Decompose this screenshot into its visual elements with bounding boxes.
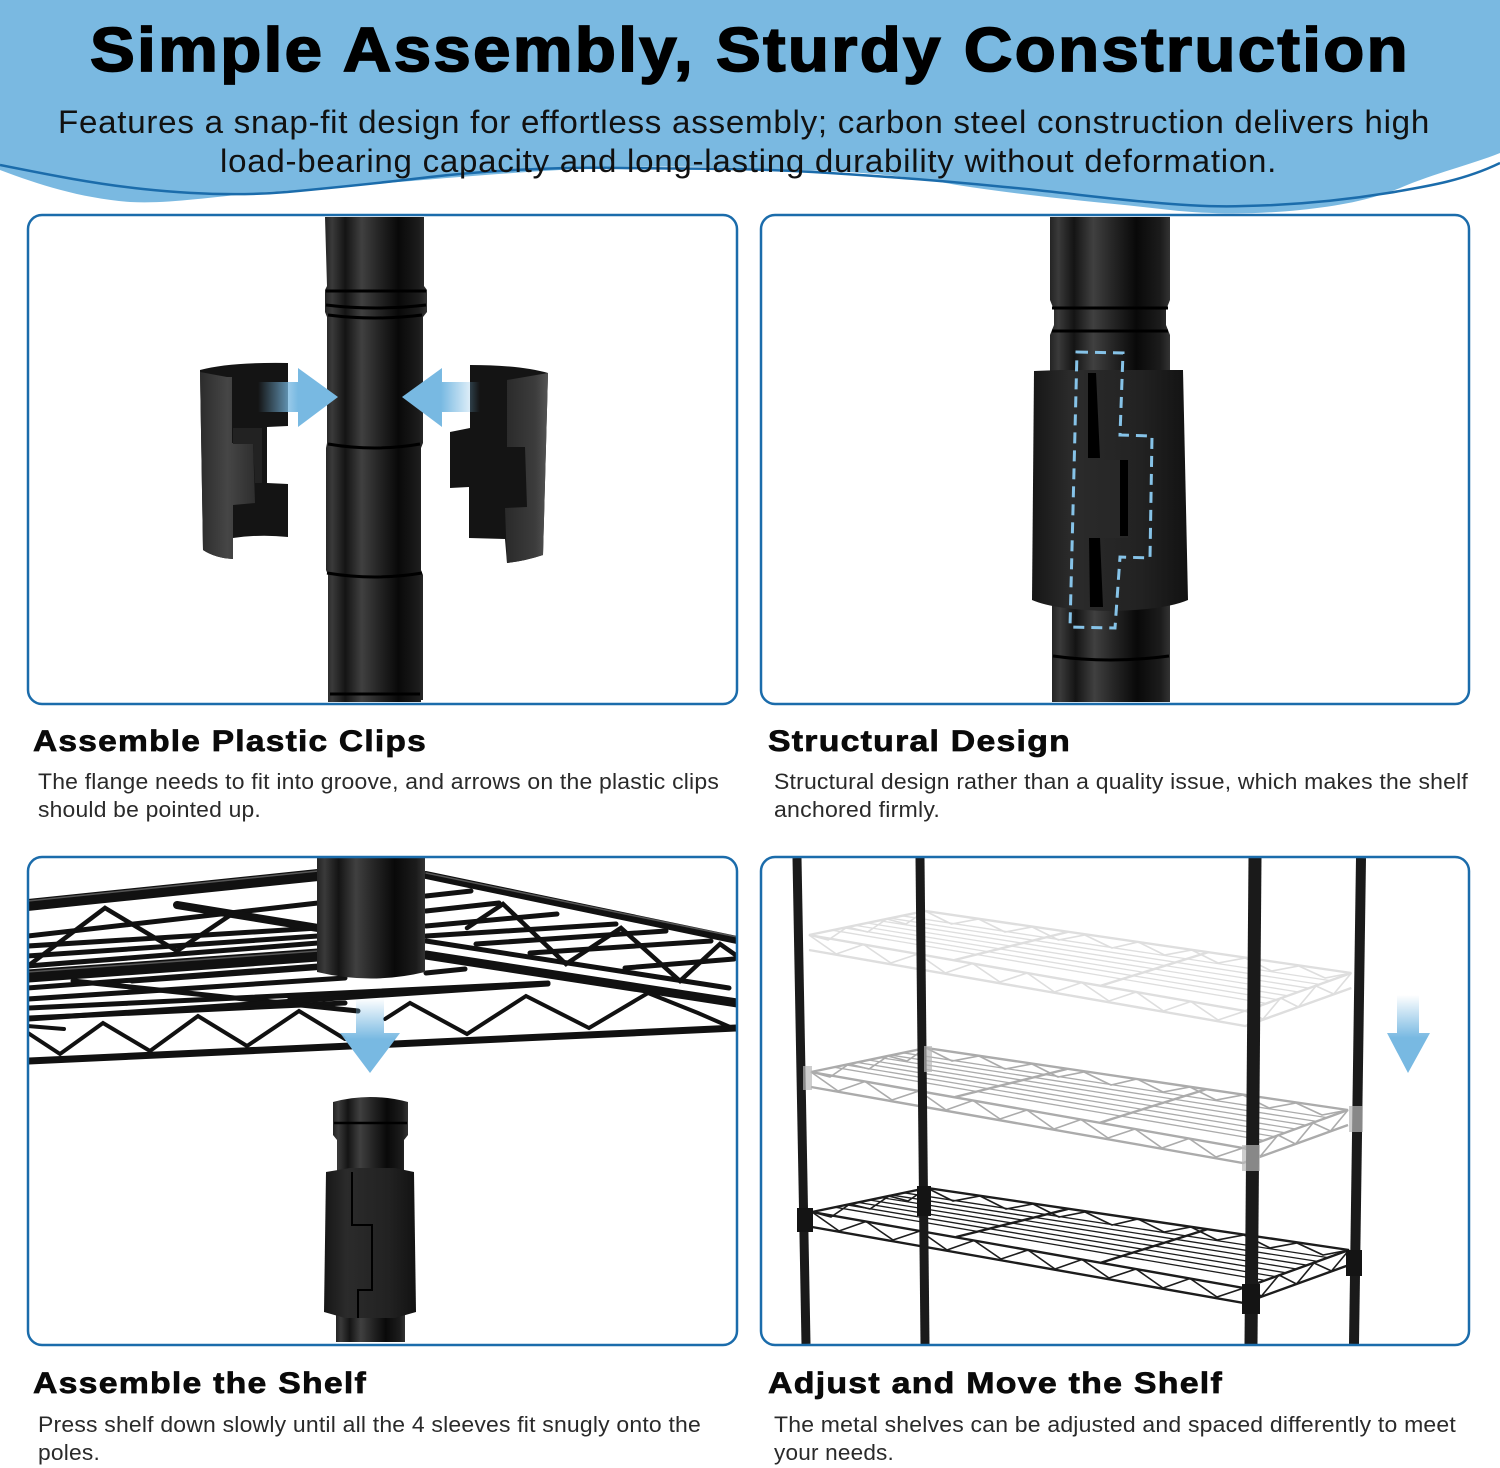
description: your needs.	[774, 1440, 894, 1465]
faded top shelf	[809, 911, 1351, 1026]
panel frame	[761, 215, 1469, 704]
description: Press shelf down slowly until all the 4 sleeves fit snugly onto the	[38, 1412, 701, 1437]
subtitle: load-bearing capacity and long-lasting durability without deformation.	[220, 143, 1277, 179]
header banner	[0, 0, 1500, 213]
arrow: shelf moves down	[1387, 995, 1430, 1073]
description: poles.	[38, 1440, 100, 1465]
poles	[797, 858, 1361, 1344]
shelf sleeves	[797, 1186, 1362, 1314]
dashed clip outline	[1070, 352, 1152, 628]
left clip	[200, 363, 288, 559]
wave line	[0, 163, 1500, 206]
panel frame	[28, 215, 737, 704]
right clip	[450, 365, 548, 563]
subtitle: Features a snap-fit design for effortless assembly; carbon steel construction delivers high	[58, 104, 1430, 140]
description	[38, 769, 719, 822]
title: Simple Assembly, Sturdy Construction	[90, 16, 1410, 85]
faded sleeves	[803, 1046, 1363, 1171]
subtitle	[58, 104, 1430, 179]
panel: assemble plastic clips	[28, 215, 737, 822]
description: The metal shelves can be adjusted and spaced differently to meet	[774, 1412, 1457, 1437]
description: should be pointed up.	[38, 797, 261, 822]
heading: Adjust and Move the Shelf	[768, 1367, 1223, 1400]
description: Structural design rather than a quality issue, which makes the shelf	[774, 769, 1469, 794]
heading: Assemble Plastic Clips	[33, 725, 427, 758]
bottom shelf	[812, 1188, 1349, 1303]
panel: assemble the shelf	[28, 857, 737, 1465]
arrow: shelf down	[340, 998, 400, 1073]
wave background	[0, 0, 1500, 213]
panel frame	[28, 857, 737, 1345]
faded middle shelf	[811, 1048, 1348, 1163]
description	[774, 1412, 1457, 1465]
description	[774, 769, 1469, 822]
panel frame	[761, 857, 1469, 1345]
arrow: left clip inward	[258, 368, 338, 427]
description: anchored firmly.	[774, 797, 940, 822]
pole with grooves	[325, 217, 427, 702]
description: The flange needs to fit into groove, and arrows on the plastic clips	[38, 769, 719, 794]
heading: Assemble the Shelf	[33, 1367, 367, 1400]
panel: structural design	[761, 215, 1469, 822]
description	[38, 1412, 701, 1465]
shelf corner wires	[28, 871, 737, 1061]
panel: adjust and move the shelf	[761, 857, 1469, 1465]
upper pole stub	[317, 858, 425, 978]
heading: Structural Design	[768, 725, 1071, 758]
arrow: right clip inward	[402, 368, 480, 427]
lower connector	[324, 1097, 416, 1342]
pole and connector	[1032, 217, 1188, 702]
